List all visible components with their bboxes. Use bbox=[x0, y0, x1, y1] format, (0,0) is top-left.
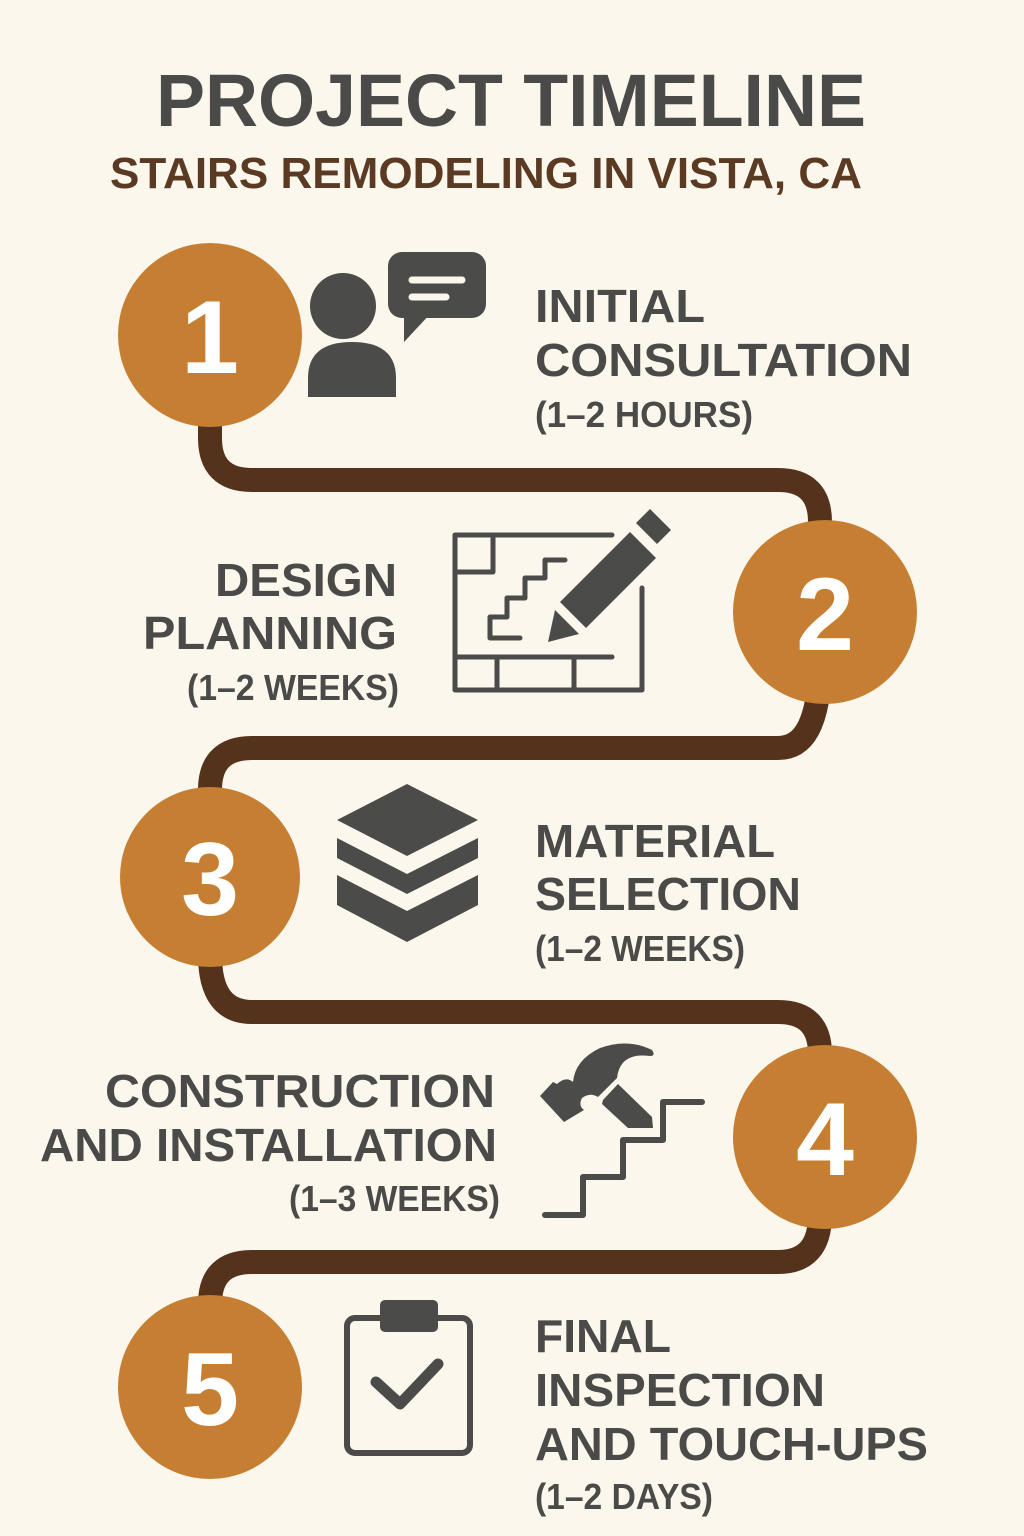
subtitle: STAIRS REMODELING IN VISTA, CA bbox=[110, 149, 862, 198]
icon: clipboard with check bbox=[347, 1300, 470, 1453]
step 5 text: FINAL bbox=[535, 1310, 671, 1362]
step 3 text: (1–2 WEEKS) bbox=[535, 928, 745, 969]
icon: person with speech bubble bbox=[308, 252, 486, 397]
step 5 text: INSPECTION bbox=[535, 1364, 825, 1416]
step 2 circle: 2 bbox=[796, 557, 854, 673]
step 1 circle: 1 bbox=[181, 280, 239, 396]
step 2 text bbox=[143, 554, 399, 708]
step 5 circle: 5 bbox=[181, 1332, 239, 1448]
icon: hammer and stairs bbox=[540, 1043, 702, 1215]
step 2 text: (1–2 WEEKS) bbox=[187, 667, 399, 708]
step 5 circle bbox=[118, 1295, 302, 1479]
step 4 circle: 4 bbox=[796, 1082, 854, 1198]
step 5 text: AND TOUCH-UPS bbox=[535, 1418, 928, 1470]
step 3 text: MATERIAL bbox=[535, 815, 775, 867]
timeline path bbox=[210, 400, 820, 1340]
step 3 circle bbox=[120, 787, 300, 967]
step 4 text bbox=[40, 1065, 500, 1219]
title: PROJECT TIMELINE bbox=[156, 59, 866, 142]
step 1 text: (1–2 HOURS) bbox=[535, 394, 753, 435]
icon: blueprint with pencil bbox=[455, 509, 671, 690]
step 3 text: SELECTION bbox=[535, 868, 801, 920]
step 4 text: AND INSTALLATION bbox=[40, 1119, 497, 1171]
step 2 circle bbox=[733, 520, 917, 704]
step 4 text: (1–3 WEEKS) bbox=[289, 1178, 500, 1219]
step 2 text: DESIGN bbox=[215, 554, 397, 606]
step 1 circle bbox=[118, 243, 302, 427]
step 1 text bbox=[535, 280, 912, 435]
step 1 text: CONSULTATION bbox=[535, 334, 912, 386]
step 5 text bbox=[535, 1310, 928, 1517]
step 4 circle bbox=[733, 1045, 917, 1229]
step 1 text: INITIAL bbox=[535, 280, 705, 332]
step 5 text: (1–2 DAYS) bbox=[535, 1476, 713, 1517]
step 3 text bbox=[535, 815, 801, 969]
step 3 circle: 3 bbox=[181, 822, 239, 938]
icon: layers bbox=[337, 784, 478, 942]
step 2 text: PLANNING bbox=[143, 607, 397, 659]
step 4 text: CONSTRUCTION bbox=[105, 1065, 495, 1117]
